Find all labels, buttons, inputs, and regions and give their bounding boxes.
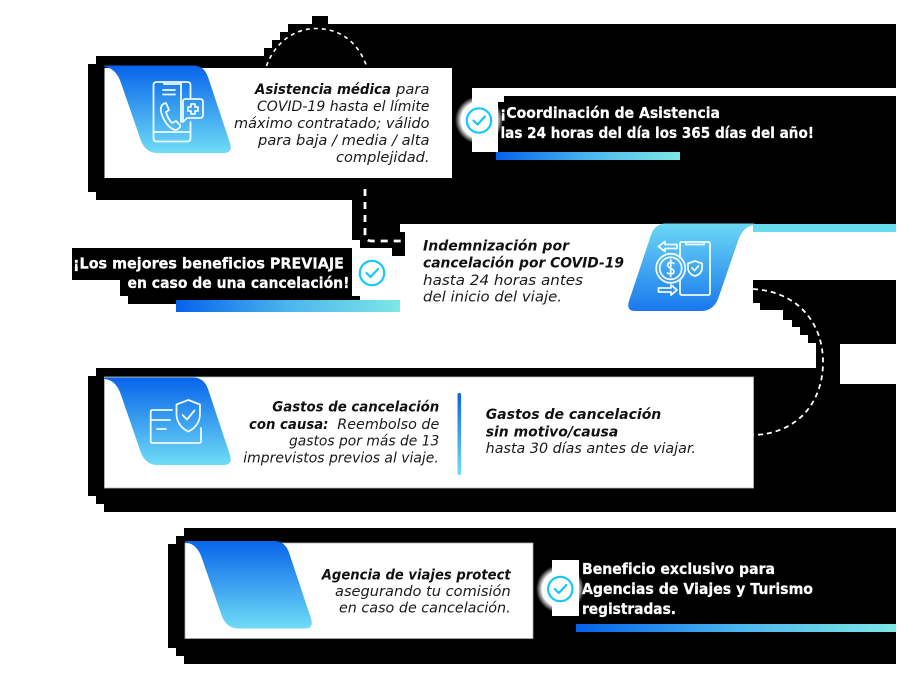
text: asistencia medica xyxy=(234,82,430,166)
text: con causa: con causa: xyxy=(249,417,328,433)
heading: beneficio: registradas. xyxy=(582,600,676,618)
text: indemnizacion xyxy=(423,239,624,306)
connector: elbow dashed line xyxy=(365,189,402,241)
heading: beneficio xyxy=(582,560,813,618)
heading: coordinacion: las 24 horas del día los 365 días del año! xyxy=(500,124,814,142)
icon: check circle xyxy=(548,577,572,601)
text: con causa: imprevistos previos al viaje. xyxy=(243,450,439,466)
heading: previaje: en caso de una cancelación! xyxy=(128,274,350,292)
text: agencia: asegurando tu comisión xyxy=(335,584,511,600)
black backdrop: top block xyxy=(88,16,896,256)
heading: coordinacion: ¡Coordinación de Asistencia xyxy=(500,104,720,122)
text: sin motivo: hasta 30 días antes de viajar. xyxy=(486,441,696,457)
black backdrop: left heading block xyxy=(72,248,360,304)
text: indemnizacion: Indemnización por xyxy=(423,239,570,255)
text: asistencia medica: para xyxy=(395,82,430,98)
panel: asistencia medica xyxy=(104,66,452,178)
callout: mejores beneficios previaje xyxy=(73,254,400,312)
text: asistencia medica: máximo contratado; válido xyxy=(234,116,430,132)
text: sin motivo: Gastos de cancelación xyxy=(486,407,661,423)
text: agencia: Agencia de viajes protect xyxy=(321,567,512,583)
text: asistencia medica: COVID-19 hasta el límite xyxy=(257,99,430,115)
icon: check circle xyxy=(467,108,491,133)
icon: card with shield xyxy=(151,400,201,443)
text: con causa: Gastos de cancelación xyxy=(272,400,439,416)
icon: phone with medical chat xyxy=(154,82,203,142)
callout: coordinacion de asistencia xyxy=(455,88,896,160)
connector: top dashed arc xyxy=(266,28,366,66)
panel: agencia de viajes protect xyxy=(185,541,533,638)
text: asistencia medica: para baja / media / alta xyxy=(257,133,430,149)
cyan strip xyxy=(753,224,896,232)
text: con causa: Reembolso de xyxy=(337,417,439,433)
text: con causa: gastos por más de 13 xyxy=(289,434,439,450)
blue tab: agencia xyxy=(186,541,312,628)
heading: previaje xyxy=(73,254,350,292)
callout: beneficio exclusivo xyxy=(536,560,896,632)
blue tab: gastos xyxy=(104,378,231,465)
text: sin motivo xyxy=(486,407,696,457)
text: con causa xyxy=(243,400,439,466)
text: sin motivo: sin motivo/causa xyxy=(486,424,618,440)
gradient bar xyxy=(176,300,400,312)
heading: previaje: ¡Los mejores beneficios PREVIAJE xyxy=(73,254,344,272)
panel: indemnizacion xyxy=(423,224,896,311)
text: indemnizacion: cancelación por COVID-19 xyxy=(423,256,624,272)
blue tab: asistencia medica xyxy=(104,66,231,153)
blue tab: indemnizacion xyxy=(628,224,754,311)
divider xyxy=(458,393,461,475)
black backdrop: bottom block xyxy=(168,528,896,664)
text: agencia xyxy=(321,567,512,617)
text: indemnizacion: del inicio del viaje. xyxy=(423,290,562,306)
heading: beneficio: Agencias de Viajes y Turismo xyxy=(582,580,813,598)
heading: beneficio: Beneficio exclusivo para xyxy=(582,560,775,578)
text: indemnizacion: hasta 24 horas antes xyxy=(423,273,583,289)
connector: large right dashed arc xyxy=(753,289,823,435)
heading: coordinacion xyxy=(500,104,814,142)
icon: phone with money and shield xyxy=(656,242,710,295)
panel: gastos de cancelacion xyxy=(104,377,754,488)
gradient bar xyxy=(576,624,896,632)
text: asistencia medica: Asistencia médica xyxy=(254,82,391,98)
text: asistencia medica: complejidad. xyxy=(336,150,430,166)
black backdrop: middle block xyxy=(88,280,896,512)
gradient bar xyxy=(496,152,680,160)
icon: check circle xyxy=(360,261,384,285)
text: agencia: en caso de cancelación. xyxy=(339,601,511,617)
